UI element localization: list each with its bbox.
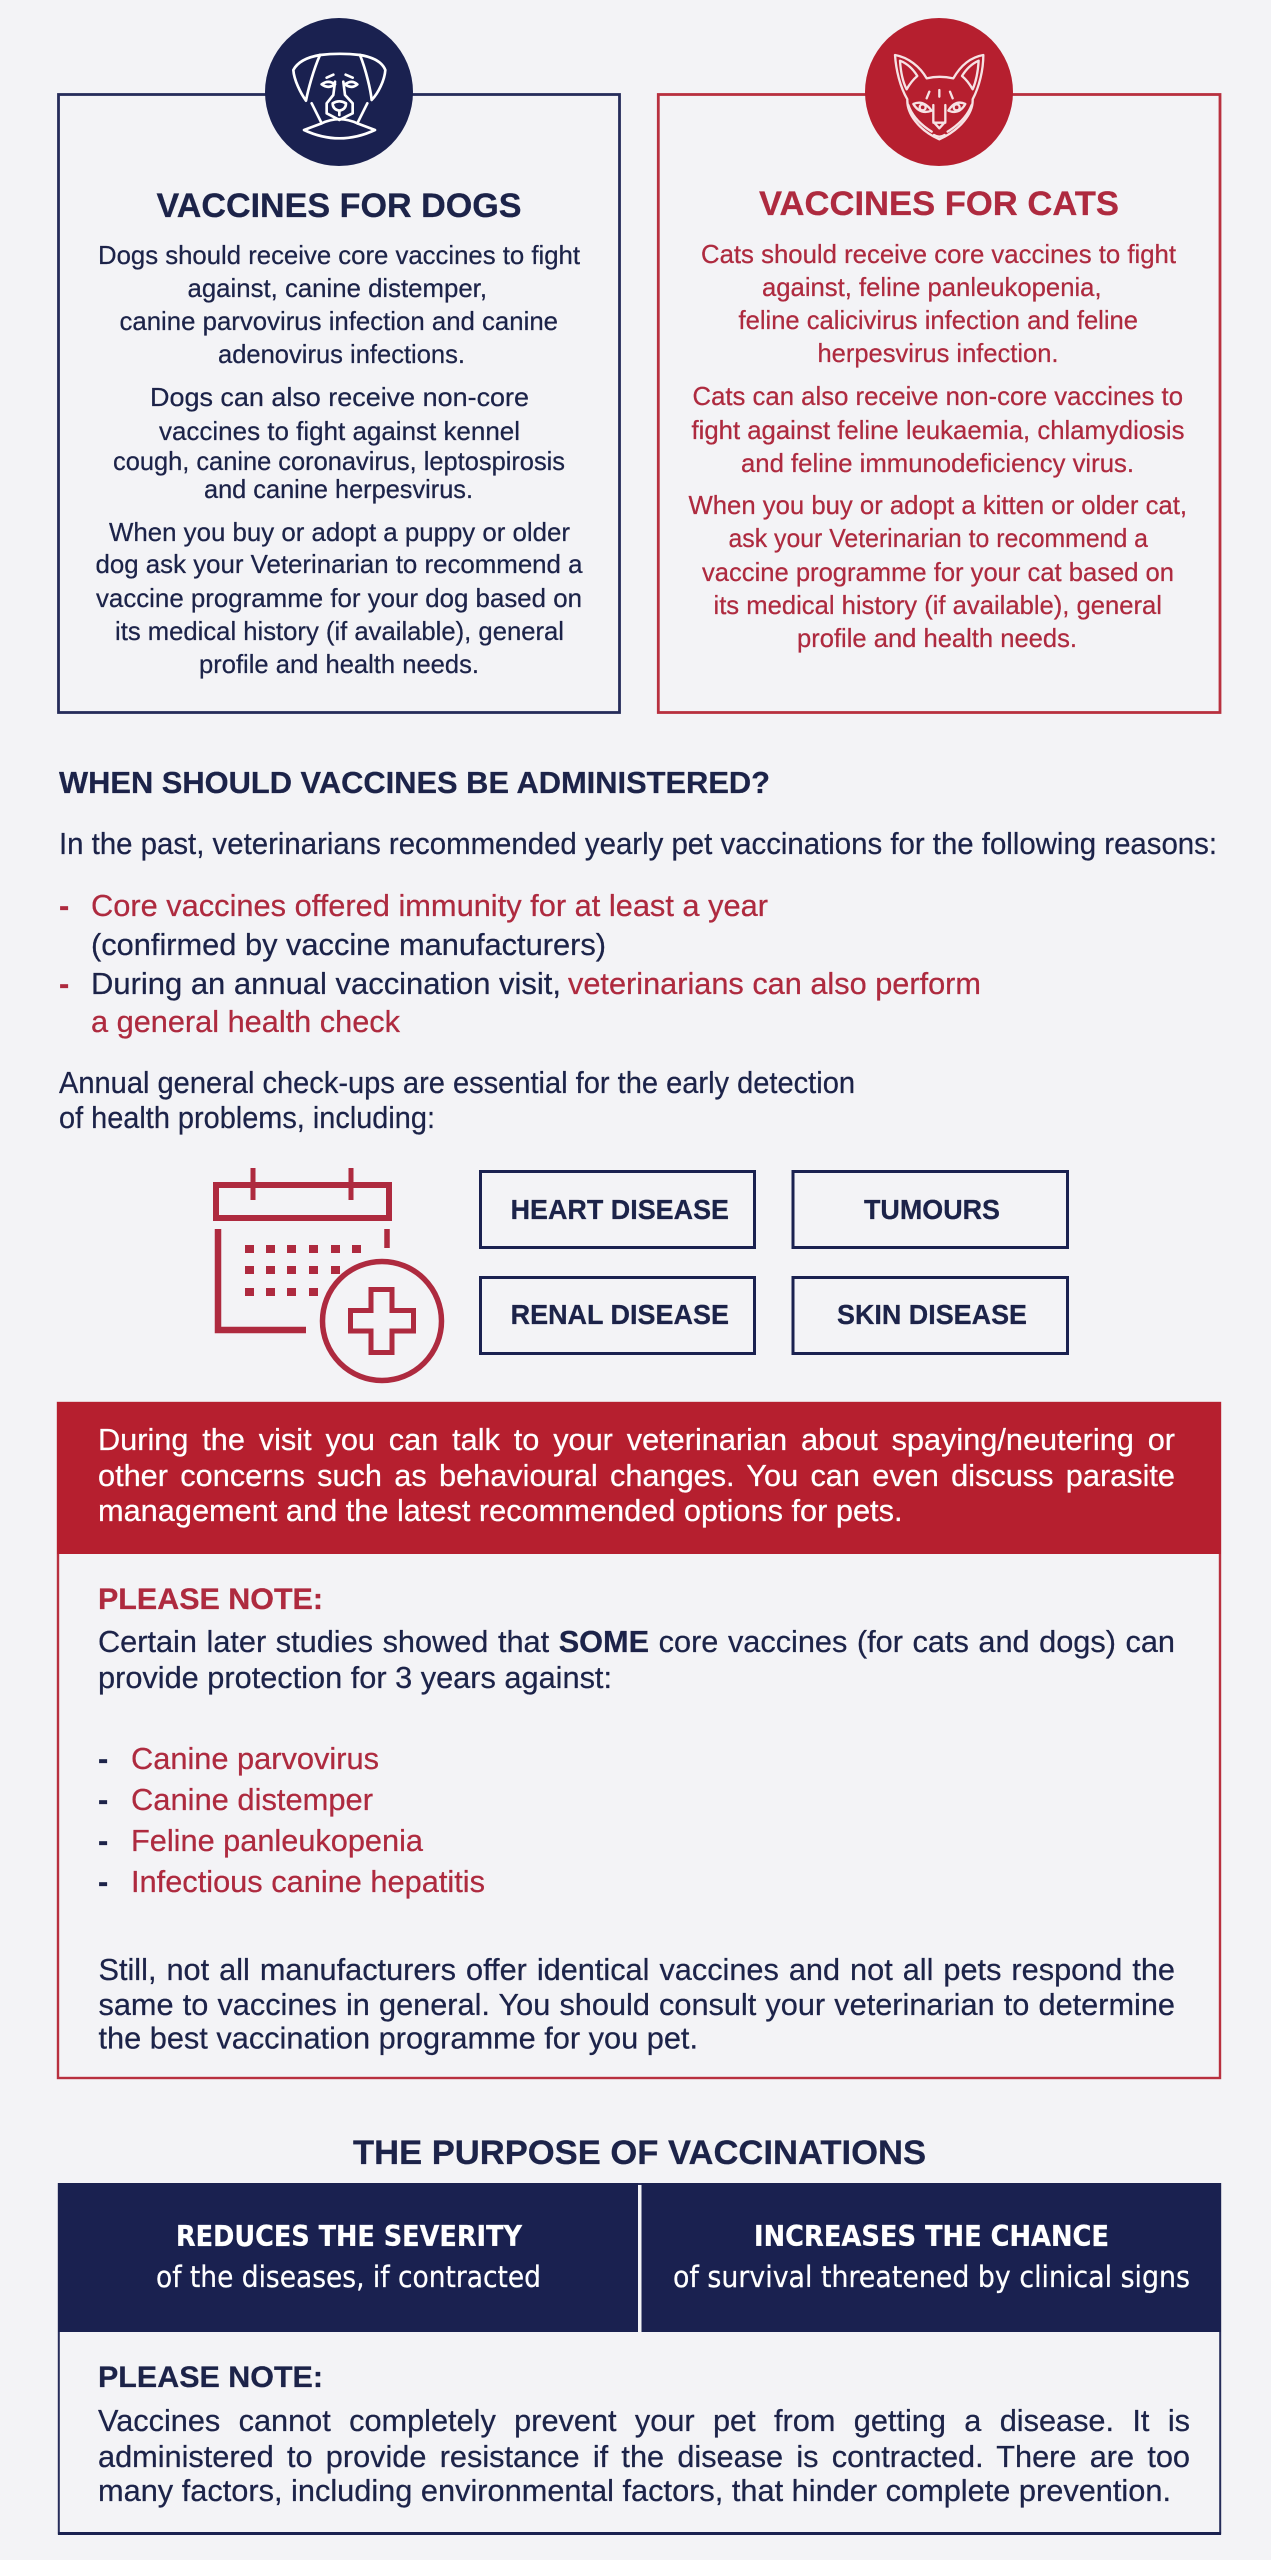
text: core vaccines for cats xyxy=(701,241,1176,368)
text: core vaccines for cats: against, feline panleukopenia, xyxy=(762,274,1102,302)
text: core vaccines for dogs: Dogs should receive core vaccines to fight xyxy=(98,242,580,270)
text: annual check-ups: of health problems, including: xyxy=(59,1100,435,1135)
text: consult note line 2: same to vaccines in general. You should consult your veterinarian to determine xyxy=(98,1987,1175,2022)
bullet: annual visit: During an annual vaccination visit, xyxy=(91,966,561,1001)
list: diseases with 3-year protection: - xyxy=(98,1782,108,1817)
tag: heart disease xyxy=(480,1172,754,1248)
list: diseases with 3-year protection xyxy=(98,1741,485,1899)
text: last line of prevention note: many factors, including environmental factors, that hinder complete prevention. xyxy=(98,2473,1171,2508)
text: dog adoption advice: profile and health needs. xyxy=(199,651,479,679)
text: core vaccines for cats: feline calicivirus infection and feline xyxy=(738,307,1138,335)
bullet: annual visit: a general health check xyxy=(91,1004,401,1039)
panel bottom edge xyxy=(58,2532,1221,2535)
tag: skin disease xyxy=(793,1278,1068,1354)
panel frame: navy outline xyxy=(59,2184,1220,2534)
text: prevention note line 2: administered to provide resistance if the disease is contracted. There are too xyxy=(98,2439,1190,2474)
disease tags xyxy=(479,1170,1069,1355)
list: diseases with 3-year protection: Feline panleukopenia xyxy=(131,1823,424,1858)
panel: purpose of vaccinations xyxy=(58,2183,1222,2535)
text: core vaccines for dogs: adenovirus infections. xyxy=(218,341,465,369)
text: non-core vaccines for dogs: vaccines to fight against kennel xyxy=(159,418,520,446)
panel frame: dogs xyxy=(58,94,620,712)
heading: vaccines for dogs: VACCINES FOR DOGS xyxy=(156,187,522,225)
tag: renal disease xyxy=(480,1278,754,1354)
bullet: core vaccines immunity xyxy=(59,888,768,962)
list: diseases with 3-year protection: Infectious canine hepatitis xyxy=(131,1864,485,1899)
text: cat adoption advice xyxy=(688,492,1187,653)
heading: vaccines for cats: VACCINES FOR CATS xyxy=(759,185,1119,223)
text: cat adoption advice: When you buy or adopt a kitten or older cat, xyxy=(688,492,1187,520)
text: non-core vaccines for dogs: Dogs can also receive non-core xyxy=(150,384,529,412)
text: last line of consult note: the best vaccination programme for you pet. xyxy=(98,2020,698,2056)
text: core vaccines for dogs: canine parvovirus infection and canine xyxy=(120,308,558,336)
text: non-core vaccines for dogs xyxy=(113,384,565,504)
header band: red xyxy=(57,1402,1221,1554)
text: visit note line 2: other concerns such as behavioural changes. You can even discuss parasite xyxy=(98,1458,1175,1493)
panel: vaccines for cats xyxy=(656,18,1222,714)
text: core vaccines for dogs: against, canine distemper, xyxy=(188,275,487,303)
text: non-core vaccines for cats: Cats can also receive non-core vaccines to xyxy=(692,383,1183,411)
benefit: increases the chance: of survival threatened by clinical signs xyxy=(673,2260,1190,2294)
benefit: reduces the severity: of the diseases, if contracted xyxy=(156,2260,541,2294)
heading: please note: PLEASE NOTE: xyxy=(98,2361,323,2394)
icon: dog in navy circle xyxy=(265,18,413,166)
benefit: increases the chance xyxy=(642,2183,1221,2332)
text: dog adoption advice: dog ask your Veterinarian to recommend a xyxy=(96,551,583,579)
panel frame: red outline xyxy=(58,1403,1220,2078)
bullet: annual visit: - xyxy=(59,966,69,1001)
benefit: reduces the severity: REDUCES THE SEVERITY xyxy=(176,2220,522,2253)
benefit: reduces the severity xyxy=(58,2183,638,2332)
bullet: annual visit xyxy=(59,966,981,1039)
icon: calendar with medical cross xyxy=(213,1168,444,1384)
bullet: core vaccines immunity: (confirmed by vaccine manufacturers) xyxy=(91,927,606,962)
heading: the purpose of vaccinations: THE PURPOSE OF VACCINATIONS xyxy=(353,2134,926,2172)
list: diseases with 3-year protection: - xyxy=(98,1823,108,1858)
text: visit note line 1: During the visit you can talk to your veterinarian about spaying/neutering or xyxy=(98,1422,1175,1457)
text: non-core vaccines for cats: fight against feline leukaemia, chlamydiosis xyxy=(692,417,1184,445)
text: cat adoption advice: profile and health needs. xyxy=(797,625,1077,653)
list: diseases with 3-year protection: - xyxy=(98,1864,108,1899)
panel: vaccines for dogs xyxy=(57,18,621,714)
text: studies note line 1: Certain later studies showed that SOME core vaccines (for cats and dogs) can xyxy=(98,1624,1175,1659)
text: annual check-ups xyxy=(59,1065,855,1135)
list: diseases with 3-year protection: Canine parvovirus xyxy=(131,1741,379,1776)
list: diseases with 3-year protection: Canine distemper xyxy=(131,1782,373,1817)
text: last line of visit note: management and the latest recommended options for pets. xyxy=(98,1493,902,1528)
text: cat adoption advice: vaccine programme for your cat based on xyxy=(702,559,1174,587)
bullet: annual visit: veterinarians can also perform xyxy=(568,966,981,1001)
panel: visit talk and please note xyxy=(56,1402,1222,2080)
text: non-core vaccines for cats: and feline immunodeficiency virus. xyxy=(741,450,1134,478)
icon: cat in red circle xyxy=(865,18,1013,166)
tag: tumours xyxy=(793,1172,1068,1248)
text: dog adoption advice xyxy=(96,519,583,679)
tag: heart disease: HEART DISEASE xyxy=(511,1194,729,1225)
text: dog adoption advice: When you buy or adopt a puppy or older xyxy=(109,519,570,547)
panel frame: cats xyxy=(658,94,1220,712)
text: core vaccines for cats: Cats should receive core vaccines to fight xyxy=(701,241,1176,269)
bullet: core vaccines immunity: - xyxy=(59,888,69,923)
bullet: core vaccines immunity: Core vaccines offered immunity for at least a year xyxy=(91,888,768,923)
text: core vaccines for dogs xyxy=(98,242,580,369)
text: non-core vaccines for dogs: and canine herpesvirus. xyxy=(204,476,473,504)
text: cat adoption advice: ask your Veterinarian to recommend a xyxy=(728,525,1149,553)
list: diseases with 3-year protection: - xyxy=(98,1741,108,1776)
tag: tumours: TUMOURS xyxy=(864,1194,1000,1225)
text: dog adoption advice: its medical history (if available), general xyxy=(115,618,564,646)
text: annual check-ups: Annual general check-ups are essential for the early detection xyxy=(59,1065,855,1100)
text: prevention note line 1: Vaccines cannot completely prevent your pet from getting a disease. It is xyxy=(98,2403,1190,2438)
text: non-core vaccines for cats xyxy=(692,383,1184,478)
text: non-core vaccines for dogs: cough, canine coronavirus, leptospirosis xyxy=(113,448,565,476)
text: second line of studies note: provide protection for 3 years against: xyxy=(98,1660,612,1695)
tag: renal disease: RENAL DISEASE xyxy=(511,1299,729,1330)
heading: please note: PLEASE NOTE: xyxy=(98,1583,323,1616)
text: dog adoption advice: vaccine programme for your dog based on xyxy=(96,585,582,613)
text: cat adoption advice: its medical history (if available), general xyxy=(714,592,1162,620)
tag: skin disease: SKIN DISEASE xyxy=(837,1299,1027,1330)
section: when should vaccines be administered xyxy=(58,766,1217,1135)
text: core vaccines for cats: herpesvirus infection. xyxy=(818,340,1058,368)
heading: when should vaccines be administered: WHEN SHOULD VACCINES BE ADMINISTERED? xyxy=(59,766,770,800)
benefit: increases the chance: INCREASES THE CHANCE xyxy=(754,2220,1109,2253)
text: intro: In the past, veterinarians recommended yearly pet vaccinations for the following reasons: xyxy=(59,826,1217,861)
text: consult note line 1: Still, not all manufacturers offer identical vaccines and not all pets respond the xyxy=(98,1952,1175,1987)
